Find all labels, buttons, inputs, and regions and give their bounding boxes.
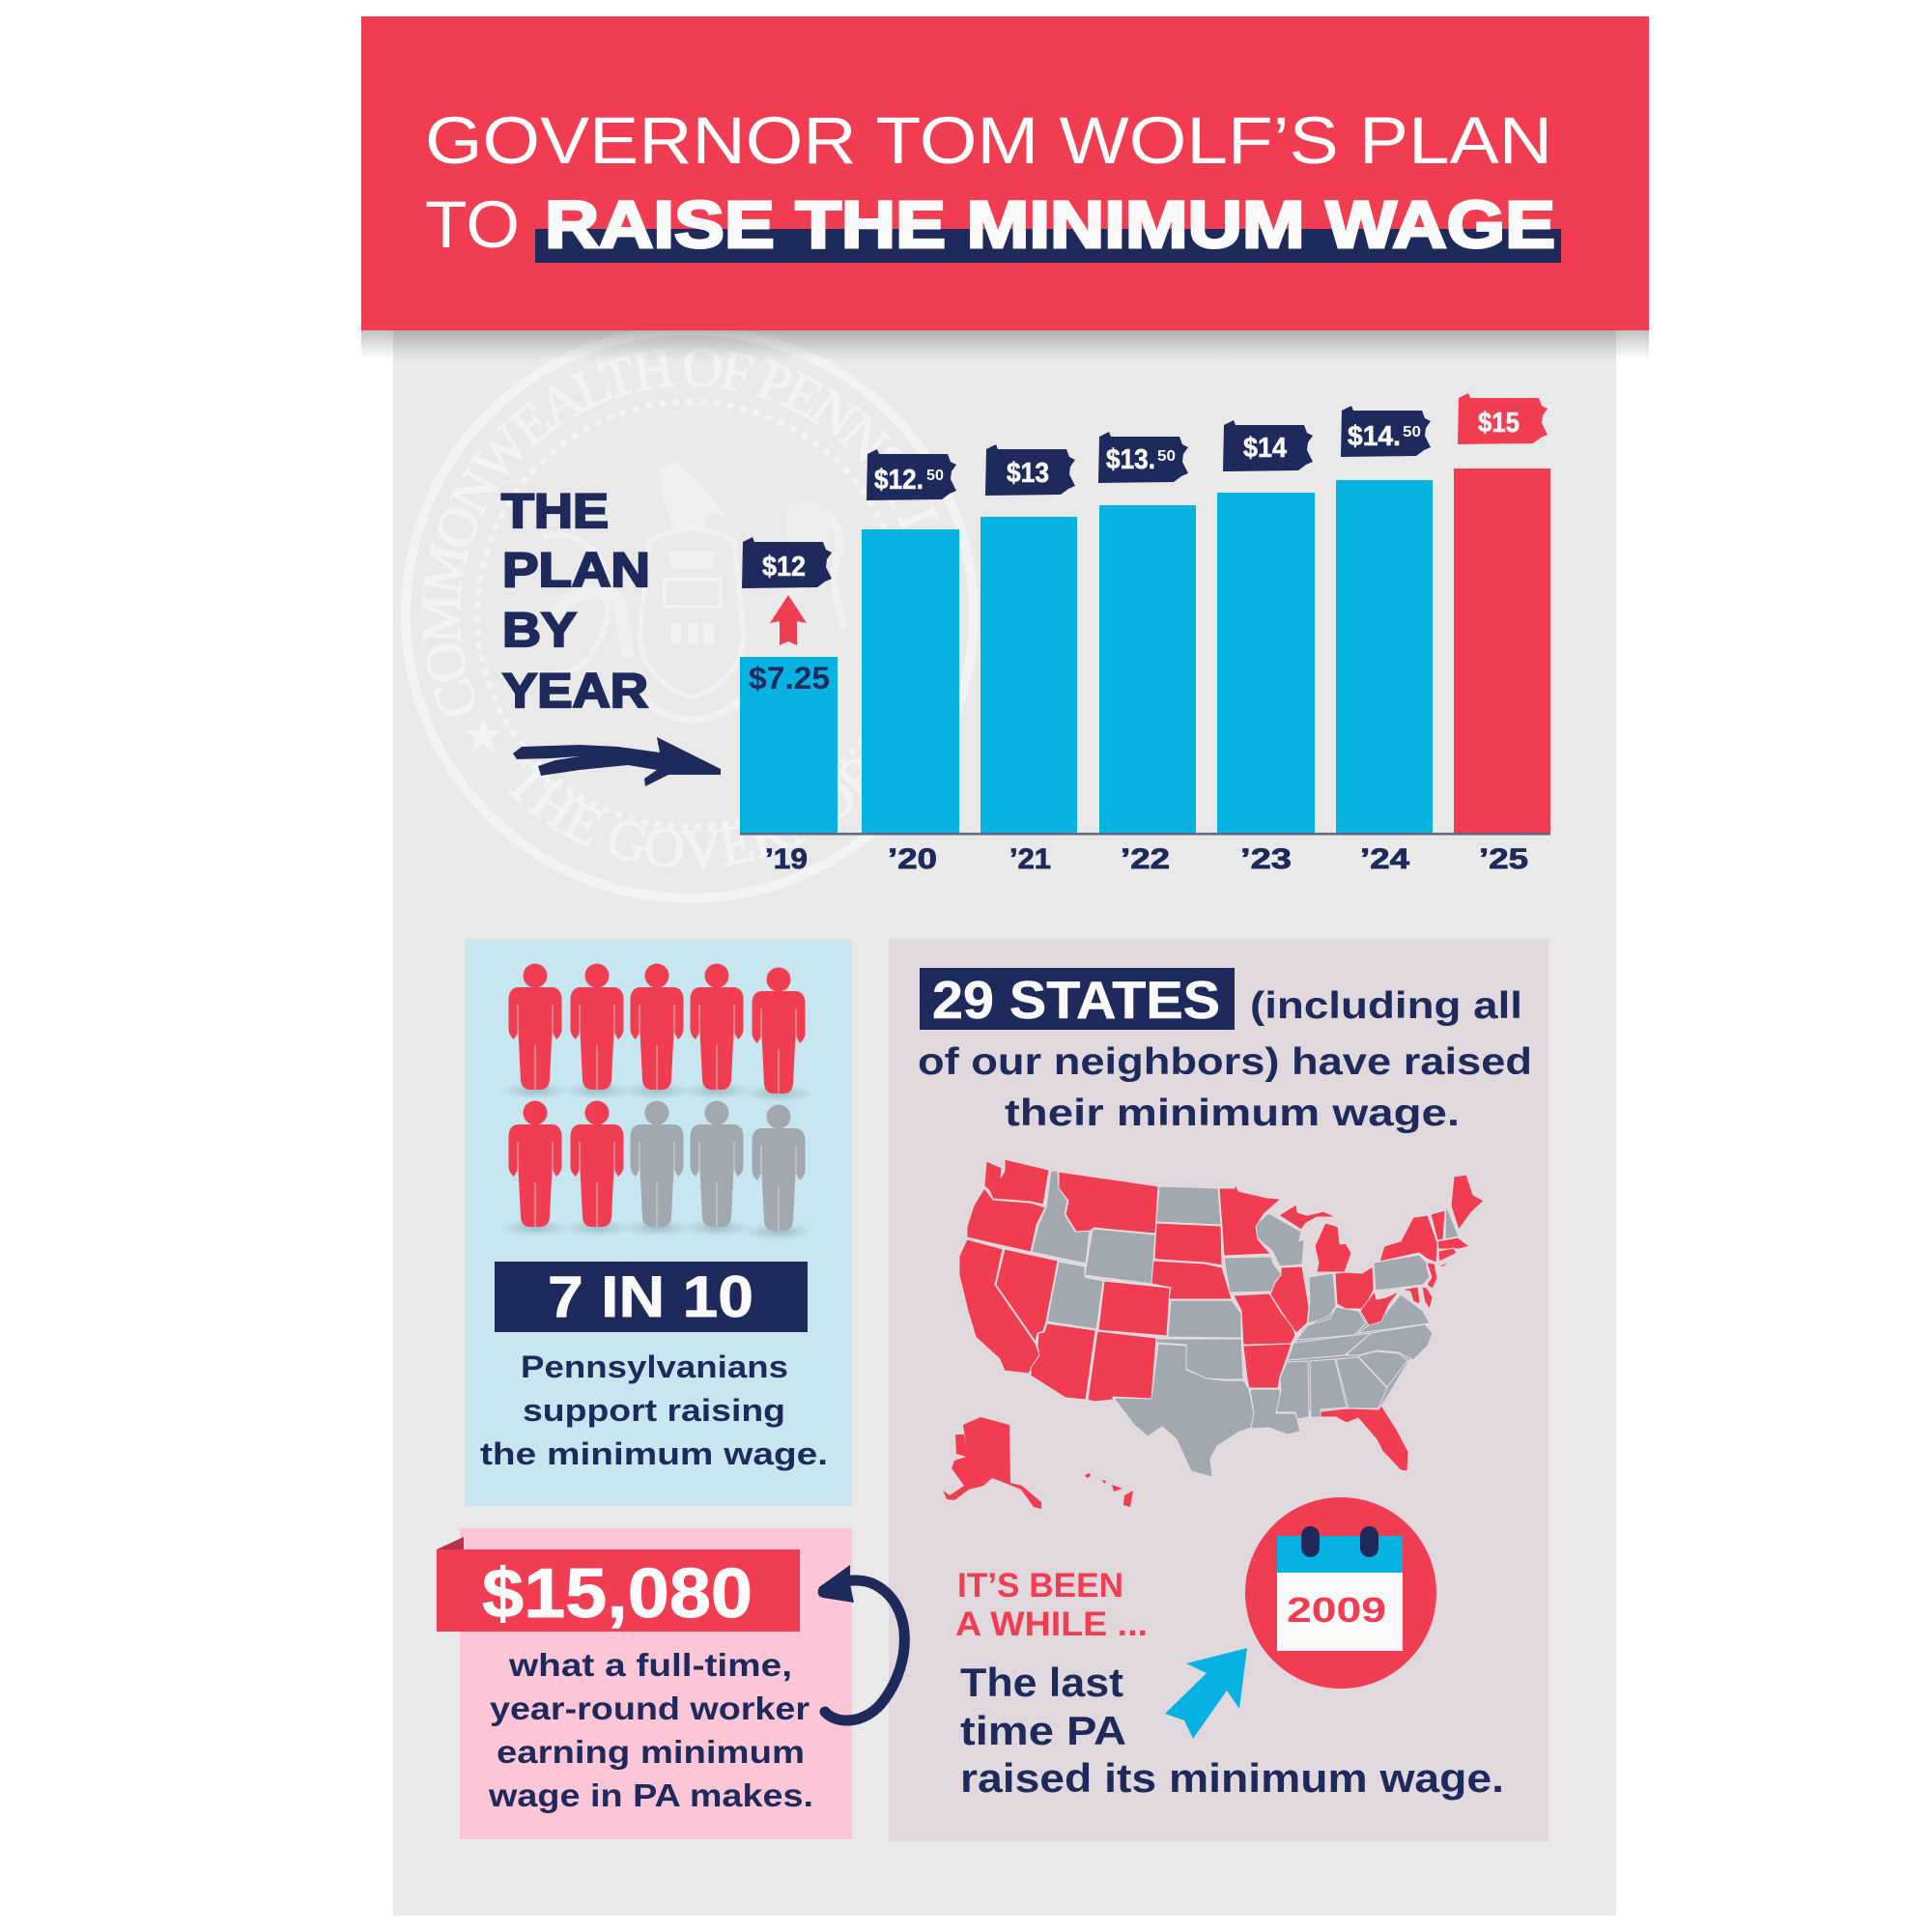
neighbors text: their minimum wage. xyxy=(1005,1093,1460,1134)
stat label block xyxy=(495,1262,808,1332)
tag: 2020 $12.50: $12. xyxy=(874,465,923,496)
icon: calendar 2009: 2009 xyxy=(1287,1590,1386,1630)
year labels: ’24 xyxy=(1360,843,1409,875)
tag: 2023 $14 xyxy=(1223,420,1313,471)
its been a while heading: A WHILE ... xyxy=(955,1605,1148,1643)
tag: 2025 $15 xyxy=(1458,393,1548,444)
its been a while heading xyxy=(955,1567,1148,1643)
tag: 2020 $12.50: 50 xyxy=(926,468,944,484)
tag: 2021 $13: $13 xyxy=(1007,458,1049,489)
current wage label: $7.25 xyxy=(749,661,830,696)
support text: the minimum wage. xyxy=(480,1436,828,1471)
header shadow xyxy=(361,330,1649,359)
title line 2: TO: TO xyxy=(425,187,520,262)
year labels: ’19 xyxy=(765,843,808,875)
background panel xyxy=(393,330,1616,1916)
stat label block: 7 IN 10 xyxy=(548,1264,753,1329)
last raised text: raised its minimum wage. xyxy=(960,1755,1504,1801)
tag: 2019 $12: $12 xyxy=(762,552,806,582)
neighbors text: (including all xyxy=(1250,985,1522,1027)
watermark: state seal xyxy=(401,338,979,903)
arrow: brush arrow to chart xyxy=(513,737,721,786)
year labels: ’23 xyxy=(1240,843,1292,875)
heading: the plan by year: THE xyxy=(501,484,609,538)
panel: 29 states xyxy=(889,939,1548,1841)
icon: calendar 2009 xyxy=(1245,1497,1436,1689)
ribbon fold xyxy=(437,1537,464,1549)
earnings text: earning minimum xyxy=(497,1734,805,1770)
bars xyxy=(740,469,1550,833)
tag: 2019 $12 xyxy=(742,537,832,588)
watermark: state seal: THE GOVERNOR xyxy=(508,757,862,868)
arrow: up arrow xyxy=(770,595,807,645)
heading: the plan by year: PLAN xyxy=(502,543,650,597)
ribbon with amount: $15,080 xyxy=(482,1555,753,1633)
panel: $15,080 xyxy=(437,1528,852,1839)
heading: the plan by year: YEAR xyxy=(502,664,648,718)
last raised text xyxy=(960,1660,1504,1801)
tag: 2023 $14: $14 xyxy=(1243,433,1287,464)
tag: 2024 $14.50: $14. xyxy=(1348,421,1401,452)
earnings text: wage in PA makes. xyxy=(488,1777,813,1813)
year labels: ’21 xyxy=(1009,843,1051,875)
tag: 2024 $14.50 xyxy=(1341,406,1431,457)
support text: support raising xyxy=(523,1393,785,1428)
year labels: ’22 xyxy=(1121,843,1170,875)
panel: 7 in 10 xyxy=(465,939,852,1506)
neighbors text xyxy=(918,985,1532,1134)
last raised text: time PA xyxy=(960,1708,1126,1753)
bar chart xyxy=(740,393,1550,875)
earnings text xyxy=(488,1647,813,1813)
tag: 2022 $13.50 xyxy=(1098,432,1188,483)
earnings text: year-round worker xyxy=(490,1690,810,1726)
year labels xyxy=(765,843,1528,875)
arrow: curved arrow to amount xyxy=(818,1565,904,1720)
support text: Pennsylvanians xyxy=(521,1350,788,1384)
header band xyxy=(361,16,1649,330)
title line 2: emphasis: RAISE THE MINIMUM WAGE xyxy=(545,187,1555,262)
tag: 2020 $12.50 xyxy=(867,449,956,500)
watermark: state seal: COMMONWEALTH OF PENNSYLVANIA xyxy=(422,348,939,717)
its been a while heading: IT’S BEEN xyxy=(957,1567,1123,1605)
tag: 2022 $13.50: 50 xyxy=(1157,448,1176,465)
earnings text: what a full-time, xyxy=(508,1647,792,1683)
neighbors text: of our neighbors) have raised xyxy=(918,1041,1532,1083)
axis line xyxy=(740,833,1550,835)
year labels: ’25 xyxy=(1479,843,1528,875)
map: US states xyxy=(943,1159,1484,1509)
icon: ten people xyxy=(500,964,813,1240)
support text xyxy=(480,1350,828,1471)
title underline block xyxy=(535,229,1561,263)
arrow: cyan arrow to calendar xyxy=(1165,1648,1247,1739)
tag: 2021 $13 xyxy=(985,444,1075,496)
heading: the plan by year xyxy=(501,484,650,718)
stat label block: 29 STATES xyxy=(932,970,1220,1030)
year labels: ’20 xyxy=(888,843,937,875)
last raised text: The last xyxy=(960,1660,1123,1705)
ribbon with amount xyxy=(437,1549,800,1633)
tag: 2024 $14.50: 50 xyxy=(1403,424,1421,440)
tag: 2025 $15: $15 xyxy=(1478,408,1520,439)
heading: the plan by year: BY xyxy=(502,603,577,657)
tag: 2022 $13.50: $13. xyxy=(1106,444,1155,475)
title line 1: GOVERNOR TOM WOLF’S PLAN xyxy=(425,103,1552,178)
